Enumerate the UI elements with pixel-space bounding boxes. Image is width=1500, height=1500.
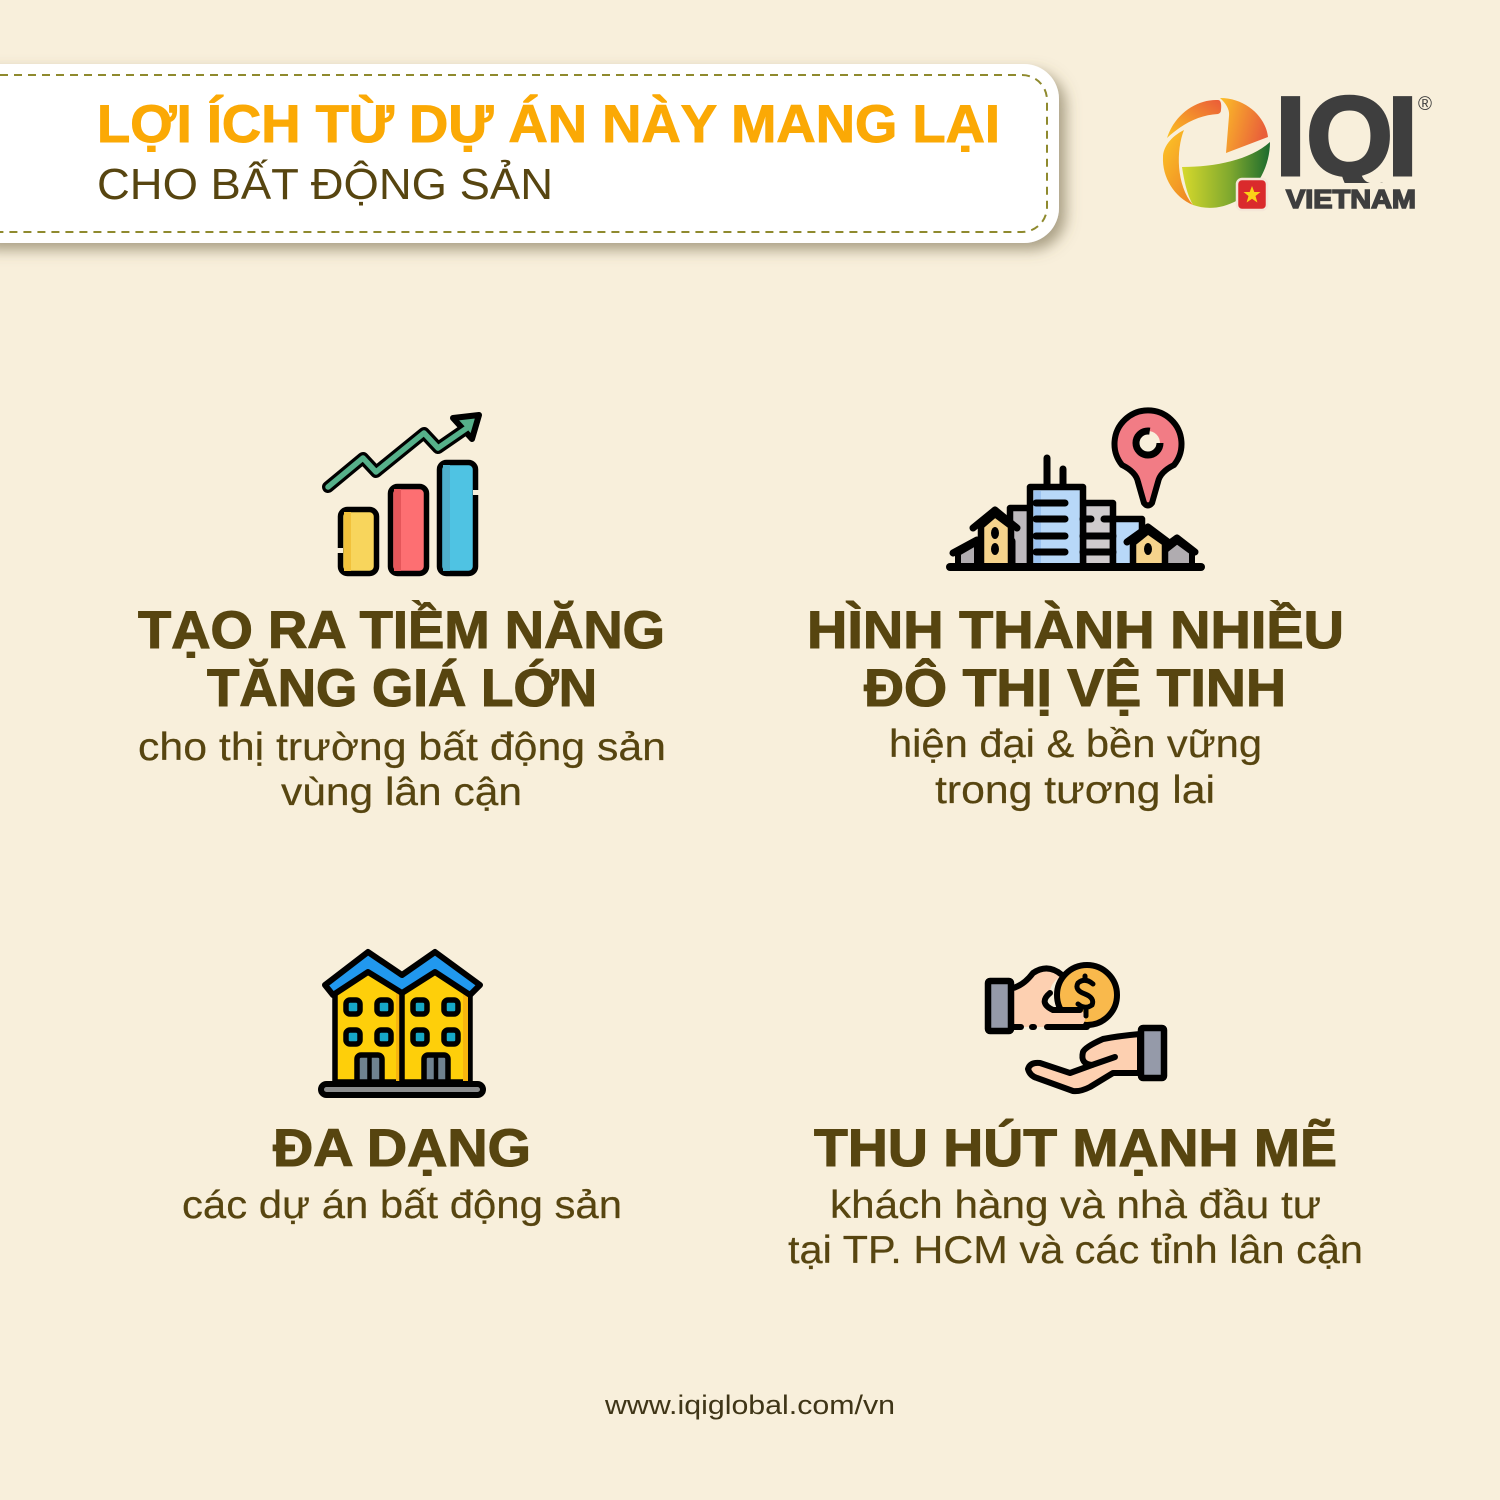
heading: HÌNH THÀNH NHIỀU xyxy=(807,600,1344,660)
header banner xyxy=(0,64,1059,243)
description: trong tương lai xyxy=(935,769,1215,812)
heading: TĂNG GIÁ LỚN xyxy=(207,658,597,718)
description: hiện đại & bền vững xyxy=(889,723,1262,766)
heading: ĐÔ THỊ VỆ TINH xyxy=(864,657,1286,718)
heading: ĐA DẠNG xyxy=(273,1119,531,1178)
icon: rising bar chart xyxy=(328,415,479,574)
description xyxy=(138,726,666,814)
website url: www.iqiglobal.com/vn xyxy=(604,1390,895,1420)
logo globe xyxy=(1163,98,1270,208)
logo: IQI Vietnam xyxy=(1162,94,1432,209)
heading xyxy=(807,600,1344,718)
panel: diverse projects xyxy=(182,952,622,1227)
title: LỢI ÍCH TỪ DỰ ÁN NÀY MANG LẠI xyxy=(97,94,1000,154)
description: vùng lân cận xyxy=(281,771,522,814)
description: tại TP. HCM và các tỉnh lân cận xyxy=(788,1229,1363,1272)
description: các dự án bất động sản xyxy=(182,1184,622,1227)
description xyxy=(889,723,1262,812)
description: cho thị trường bất động sản xyxy=(138,726,666,769)
description: khách hàng và nhà đầu tư xyxy=(830,1184,1321,1227)
heading xyxy=(138,600,665,718)
icon: townhouses xyxy=(321,952,483,1095)
logo sub-wordmark: VIETNAM xyxy=(1286,184,1416,214)
heading: THU HÚT MẠNH MẼ xyxy=(814,1118,1337,1178)
registered mark: ® xyxy=(1418,94,1432,115)
panel: attract investors xyxy=(788,965,1363,1272)
icon: city with location pin xyxy=(950,410,1201,567)
description xyxy=(788,1184,1363,1272)
subtitle: CHO BẤT ĐỘNG SẢN xyxy=(97,159,553,209)
panel: satellite cities xyxy=(807,410,1344,812)
banner card xyxy=(0,64,1059,243)
panel: price potential xyxy=(138,415,666,814)
icon: hands with coin xyxy=(988,965,1164,1091)
heading: TẠO RA TIỀM NĂNG xyxy=(138,600,665,660)
icon: Vietnam flag xyxy=(1237,179,1267,210)
logo wordmark: IQI xyxy=(1275,74,1418,199)
